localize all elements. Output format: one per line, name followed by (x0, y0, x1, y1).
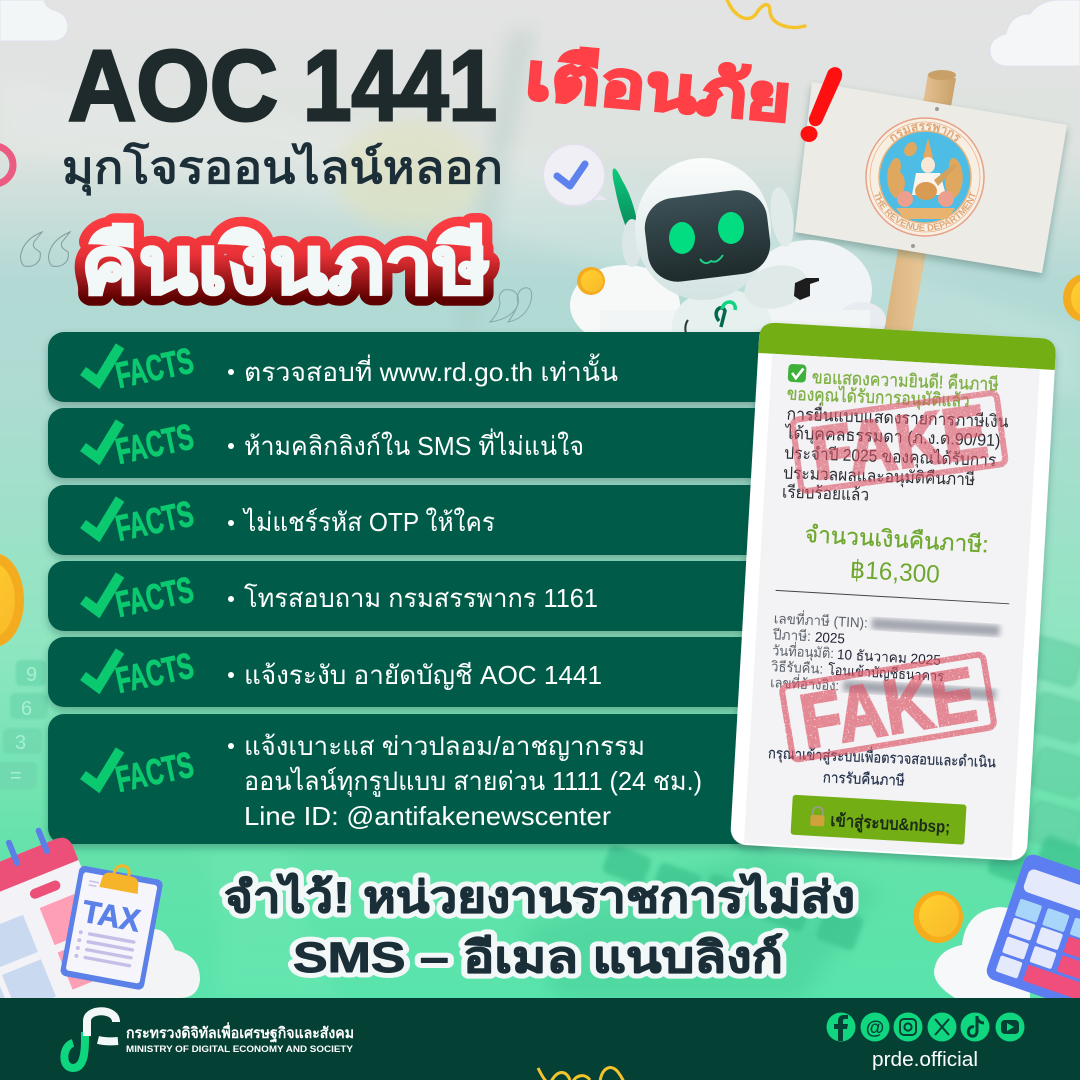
illustration: tax clipboard (60, 858, 165, 991)
fact 5: FACTS (112, 645, 197, 701)
fact 6 (48, 714, 778, 844)
congratulation message: ของคุณได้รับการอนุมัติแล้ว (786, 383, 970, 412)
congratulation message: ขอแสดงความยินดี! คืนภาษี (811, 367, 999, 395)
social handle: prde.official (872, 1049, 978, 1071)
cloud: bottom right (934, 907, 1030, 998)
login instruction (766, 738, 997, 796)
fact 4 (48, 561, 778, 631)
refund amount: ฿16,300 (849, 556, 941, 589)
decoration: bottom squiggle (538, 1068, 626, 1080)
social icons: @ (866, 1018, 884, 1039)
tax details: วันที่อนุมัติ: (772, 641, 834, 662)
tax details: โอนเข้าบัญชีธนาคาร (828, 662, 945, 684)
warning heading: เตือนภัย (523, 40, 794, 135)
fact 6: แจ้งเบาะแส ข่าวปลอม/อาชญากรรม (244, 731, 645, 761)
sign board (793, 82, 1070, 280)
social icons (826, 1012, 1024, 1042)
tax details: วิธีรับคืน: (771, 658, 823, 677)
fact 1: FACTS (112, 340, 197, 396)
robot chest logo (716, 302, 735, 327)
background: 9 (26, 664, 37, 686)
refund amount: จำนวนเงินคืนภาษี: (804, 521, 989, 558)
body message: ประมวลผลและอนุมัติคืนภาษี (783, 464, 975, 490)
revenue department seal: กรมสรรพากร (890, 123, 961, 142)
tax details: 10 ธันวาคม 2025 (837, 646, 942, 668)
title: AOC 1441: AOC (68, 30, 278, 142)
title: AOC 1441 (68, 30, 497, 142)
congratulation message (786, 362, 1000, 417)
refund amount (802, 521, 989, 591)
wooden pole (884, 70, 956, 332)
coin right edge (1063, 274, 1080, 322)
robot mascot (570, 158, 886, 361)
decoration: close quote mark (490, 288, 532, 322)
tax details (769, 608, 1000, 703)
fake stamp: bottom: FAKE (794, 652, 982, 765)
footer bar (0, 998, 1080, 1080)
body message: เรียบร้อยแล้ว (782, 483, 869, 505)
background: 6 (21, 698, 32, 720)
fact 5: แจ้งระงับ อายัดบัญชี AOC 1441 (244, 660, 602, 690)
body message: ประจำปี 2025 ของคุณได้รับการ (784, 443, 997, 471)
body message (779, 397, 1010, 514)
body message: การยื่นแบบแสดงรายการภาษีเงิน (786, 402, 1009, 431)
facts panels (48, 332, 778, 844)
tax details: ปีภาษี: (772, 626, 811, 644)
background: 3 (15, 732, 26, 754)
login instruction: กรุณาเข้าสู่ระบบเพื่อตรวจสอบและดำเนิน (768, 742, 996, 772)
coin near robot (573, 263, 609, 299)
login instruction: การรับคืนภาษี (822, 769, 905, 790)
illustration: calendar (0, 821, 135, 1080)
ministry name: MINISTRY OF DIGITAL ECONOMY AND SOCIETY (126, 1044, 354, 1055)
ministry name (126, 1022, 354, 1055)
tax details: เลขที่ภาษี (TIN): (774, 609, 868, 631)
body message: ได้บุคคลธรรมดา (ภ.ง.ด.90/91) (783, 423, 1001, 451)
ministry name: กระทรวงดิจิทัลเพื่อเศรษฐกิจและสังคม (126, 1022, 354, 1043)
illustration: tax clipboard: TAX (80, 894, 143, 939)
fake sms card (730, 322, 1057, 861)
fact 6: ออนไลน์ทุกรูปแบบ สายด่วน 1111 (24 ชม.) (244, 766, 702, 797)
decoration: pink ring (0, 146, 13, 184)
fact 3 (48, 485, 778, 555)
footer logo (64, 1011, 120, 1068)
fact 6: Line ID: @antifakenewscenter (244, 801, 611, 831)
coin bottom right (913, 891, 963, 943)
revenue department seal (865, 117, 985, 237)
title: AOC 1441: 1441 (303, 30, 497, 142)
exclamation mark (800, 67, 842, 142)
login button: เข้าสู่ระบบ&nbsp; (830, 811, 951, 839)
revenue department seal: THE REVENUE DEPARTMENT (874, 191, 976, 232)
coin left edge (0, 553, 24, 647)
fact 1: ตรวจสอบที่ www.rd.go.th เท่านั้น (244, 353, 618, 387)
tax details: 2025 (815, 629, 846, 646)
background: = (10, 765, 22, 787)
headline: tax refund: คืนเงินภาษี (81, 221, 490, 310)
headline: tax refund: คืนเงินภาษี (81, 221, 490, 310)
fact 1 (48, 332, 778, 402)
illustration: calculator (984, 852, 1080, 1042)
cloud: top left (0, 0, 68, 41)
decoration: open quote mark (21, 232, 70, 266)
cloud: bottom left (0, 929, 200, 998)
speech bubble with check (543, 144, 607, 206)
reminder text: จำไว้! หน่วยงานราชการไม่ส่ง (224, 872, 855, 922)
decoration: top squiggle (726, 0, 805, 27)
reminder text: จำไว้! หน่วยงานราชการไม่ส่ง (224, 872, 855, 922)
fact 2: ห้ามคลิกลิงก์ใน SMS ที่ไม่แน่ใจ (244, 428, 584, 461)
fact 2: FACTS (112, 416, 197, 472)
fake stamp: top: FAKE (806, 389, 992, 496)
tax details: เลขที่อ้างอิง: (770, 673, 840, 693)
fact 2 (48, 408, 778, 478)
reminder text: SMS – อีเมล แนบลิงก์ (293, 933, 783, 982)
subtitle: online scam: มุกโจรออนไลน์หลอก (62, 142, 503, 195)
fact 4: โทรสอบถาม กรมสรรพากร 1161 (244, 583, 598, 613)
check emoji (788, 364, 807, 383)
fact 4: FACTS (112, 569, 197, 625)
fact 3: ไม่แชร์รหัส OTP ให้ใคร (242, 507, 495, 537)
cloud: top right (990, 0, 1080, 66)
fact 3: FACTS (112, 493, 197, 549)
fact 6: FACTS (112, 744, 197, 800)
fact 5 (48, 637, 778, 707)
login button (791, 795, 967, 845)
reminder text (224, 872, 855, 982)
robot cloud body (570, 240, 886, 361)
reminder text: SMS – อีเมล แนบลิงก์ (293, 933, 783, 982)
